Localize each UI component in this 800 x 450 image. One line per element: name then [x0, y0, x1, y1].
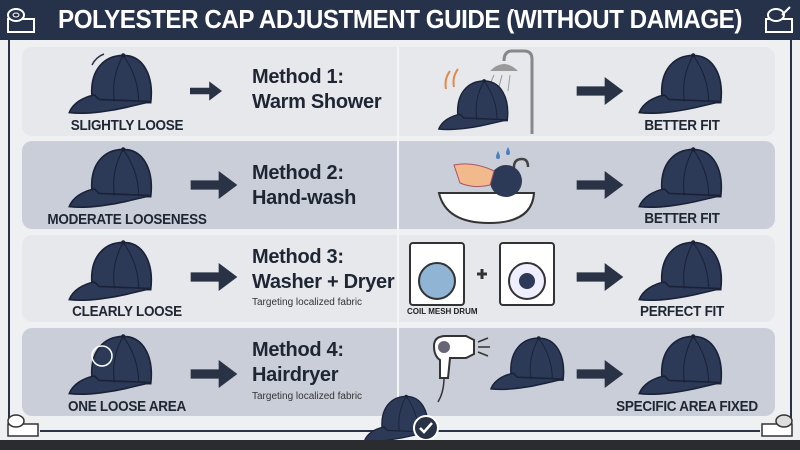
center divider — [397, 47, 399, 417]
icon: tape left bottom — [7, 414, 39, 437]
arrow — [190, 82, 222, 100]
row 3: washer + dryer: Method 3: — [252, 246, 344, 268]
icon: tape measure left — [7, 8, 35, 33]
row 2: hand-wash: Method 2: — [252, 162, 344, 184]
icon: tape right bottom — [761, 414, 793, 437]
sink illustration — [438, 147, 536, 224]
arrow — [190, 171, 238, 199]
bottom line — [40, 430, 760, 432]
icon: tape measure right — [765, 6, 793, 33]
row 3: washer + dryer: PERFECT FIT — [640, 303, 724, 320]
icon: cap with check — [364, 394, 439, 440]
dark bottom photo strip — [0, 440, 800, 450]
label: SLIGHTLY LOOSE — [71, 117, 183, 134]
title: POLYESTER CAP ADJUSTMENT GUIDE (WITHOUT DAMAGE) — [58, 4, 742, 34]
arrow — [576, 77, 624, 105]
row 4: hairdryer: Targeting localized fabric — [252, 391, 362, 402]
row 3: washer + dryer — [22, 235, 775, 322]
cap moderate — [68, 147, 152, 208]
row 4: hairdryer: Method 4: — [252, 339, 344, 361]
cap slightly loose — [68, 53, 152, 114]
header bar — [0, 0, 800, 40]
row 4: hairdryer — [22, 328, 775, 416]
row 4: hairdryer: ONE LOOSE AREA — [68, 398, 186, 415]
row 1: warm shower: Warm Shower — [252, 91, 381, 113]
row 1: warm shower — [22, 47, 775, 136]
shower illustration — [438, 50, 534, 134]
row 3: washer + dryer: Targeting localized fabric — [252, 297, 362, 308]
row 2: hand-wash — [22, 141, 775, 229]
row 1: warm shower: Method 1: — [252, 66, 344, 88]
row 3: washer + dryer: COIL MESH DRUM — [407, 307, 478, 316]
row 1: warm shower: BETTER FIT — [644, 117, 720, 134]
row 2: hand-wash: BETTER FIT — [644, 210, 720, 227]
row 2: hand-wash: MODERATE LOOSENESS — [47, 211, 207, 228]
row 2: hand-wash: Hand-wash — [252, 187, 356, 209]
cap result — [638, 53, 722, 114]
row 4: hairdryer: Hairdryer — [252, 364, 338, 386]
frame lines — [8, 40, 10, 435]
washer and dryer — [409, 242, 555, 306]
row 3: washer + dryer: Washer + Dryer — [252, 271, 394, 293]
row 4: hairdryer: SPECIFIC AREA FIXED — [616, 398, 758, 415]
hairdryer — [433, 335, 490, 402]
row 3: washer + dryer: CLEARLY LOOSE — [72, 303, 182, 320]
